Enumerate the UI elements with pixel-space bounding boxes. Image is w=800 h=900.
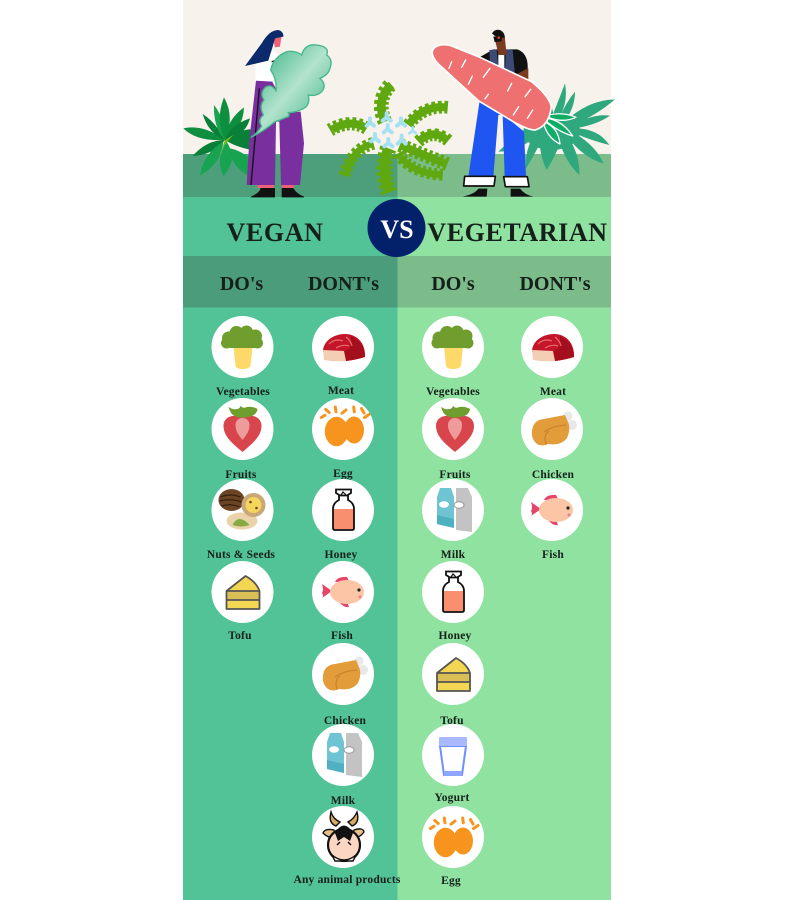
man: hand xyxy=(459,50,468,54)
item: Egg: Egg xyxy=(441,875,461,887)
item: Tofu: Tofu xyxy=(440,715,464,727)
item: Milk xyxy=(422,479,484,561)
column: vegan do's xyxy=(207,316,275,642)
man: shoes xyxy=(463,189,533,197)
badge: VS xyxy=(368,199,426,257)
item: Vegetables: Vegetables xyxy=(426,386,480,398)
woman: shoes xyxy=(251,188,304,197)
title: VEGAN: VEGAN xyxy=(227,218,323,247)
band: vegetarian column heading row xyxy=(398,256,611,308)
sky backdrop xyxy=(183,0,611,154)
item: Egg: Egg xyxy=(333,468,353,480)
band: vegan column heading row xyxy=(183,256,398,308)
panel: vegetarian background xyxy=(398,0,611,900)
ground: vegan side xyxy=(183,154,398,197)
carrot tops xyxy=(544,114,576,144)
item: Fish: Fish xyxy=(542,549,564,561)
heading: vegan DO's: DO's xyxy=(220,273,263,295)
item: Any animal products xyxy=(293,806,401,886)
item: Egg xyxy=(312,398,374,480)
item: Meat xyxy=(521,316,583,398)
woman: stripe xyxy=(251,88,259,185)
heading: vegan DONT's: DONT's xyxy=(308,273,379,295)
heading: vegetarian DONT's: DONT's xyxy=(519,273,591,295)
woman: hair xyxy=(245,30,283,66)
item: Tofu xyxy=(212,561,274,642)
woman: trousers xyxy=(247,81,304,185)
item: Fruits: Fruits xyxy=(225,469,257,481)
item: Meat: Meat xyxy=(328,385,354,397)
item: Honey: Honey xyxy=(325,549,358,561)
column: vegetarian dont's xyxy=(521,316,583,561)
fern fronds xyxy=(330,83,448,194)
plant: left spiky xyxy=(183,97,253,176)
item: Fruits xyxy=(212,398,274,481)
item: Milk xyxy=(312,724,374,807)
item: Meat xyxy=(312,316,374,397)
item: Nuts & Seeds xyxy=(207,479,275,561)
item: Yogurt xyxy=(422,724,484,804)
item: Fish: Fish xyxy=(331,630,353,642)
panel: vegan background xyxy=(183,0,398,900)
illustration: centre fern xyxy=(330,83,448,194)
column: vegetarian do's xyxy=(422,316,484,887)
item: Fruits: Fruits xyxy=(439,469,471,481)
leaf xyxy=(251,45,331,137)
item: Vegetables: Vegetables xyxy=(216,386,270,398)
ground: vegetarian side xyxy=(398,154,611,197)
title: VEGETARIAN: VEGETARIAN xyxy=(427,218,608,247)
item: Tofu xyxy=(422,643,484,727)
woman: top xyxy=(255,50,280,82)
woman: face xyxy=(273,35,282,47)
item: Fish xyxy=(521,479,583,561)
man: arm xyxy=(515,68,528,83)
item: Meat: Meat xyxy=(540,386,566,398)
man: head xyxy=(495,36,507,55)
item: Honey: Honey xyxy=(439,630,472,642)
item: Nuts & Seeds: Nuts & Seeds xyxy=(207,549,275,561)
item: Tofu: Tofu xyxy=(228,630,252,642)
fern blossoms xyxy=(367,113,416,146)
item: Vegetables xyxy=(422,316,484,398)
man: jacket xyxy=(479,49,528,75)
woman: ankles xyxy=(257,185,294,188)
item: Milk: Milk xyxy=(331,795,356,807)
item: Honey xyxy=(312,479,374,561)
item: Egg xyxy=(422,806,484,887)
man: cuffs xyxy=(464,176,529,187)
item: Fruits xyxy=(422,398,484,481)
carrot xyxy=(432,45,551,130)
item: Milk: Milk xyxy=(441,549,466,561)
woman: arm and hand xyxy=(272,58,285,62)
item: Chicken xyxy=(521,398,583,481)
item: Honey xyxy=(422,561,484,642)
man: trousers xyxy=(468,98,526,177)
item: Chicken xyxy=(312,643,374,727)
item: Vegetables xyxy=(212,316,274,398)
heading: vegetarian DO's: DO's xyxy=(431,273,475,295)
item: Any animal products: Any animal products xyxy=(293,874,401,886)
item: Yogurt: Yogurt xyxy=(434,792,470,804)
item: Chicken: Chicken xyxy=(532,469,575,481)
badge: VS: VS xyxy=(380,215,414,244)
item: Fish xyxy=(312,561,374,642)
column: vegan dont's xyxy=(293,316,401,886)
illustration: woman with leaf and plant xyxy=(183,30,331,197)
plant: right spiky xyxy=(498,83,615,175)
item: Chicken: Chicken xyxy=(324,715,367,727)
illustration: man with carrot and plant xyxy=(432,30,615,197)
